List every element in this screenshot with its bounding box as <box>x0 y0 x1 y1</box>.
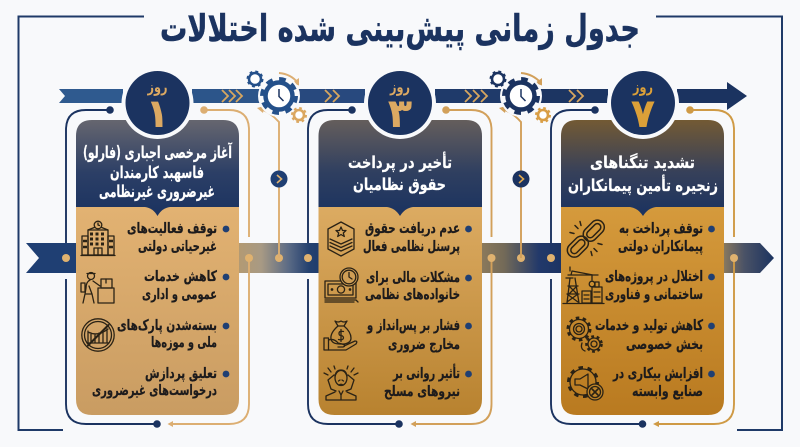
item: family financial problems: مشکلات مالی برای <box>366 270 460 286</box>
icon: military rank badge <box>328 222 354 256</box>
item: unpaid military personnel: پرسنل نظامی فعال <box>363 239 460 255</box>
connector lines: day 1 <box>66 106 249 428</box>
item: closed parks and museums: بسته‌شدن پارک‌های <box>117 318 217 334</box>
connector lines: day 7 <box>551 106 734 428</box>
item: psychological impact: تأثیر روانی بر <box>392 364 460 382</box>
header: day 3: تأخیر در پرداخت <box>348 152 452 173</box>
header: day 1: فاسهبد کارمندان <box>110 163 204 183</box>
icon: interlocking gears <box>568 318 602 352</box>
header: day 7: تشدید تنگناهای <box>590 152 695 172</box>
badge: day 3: روز <box>389 78 410 96</box>
badge: day 7 <box>607 67 679 139</box>
item: reduced public services: عمومی و اداری <box>142 287 217 303</box>
icon: broken chain <box>564 217 607 260</box>
header: day 1: آغاز مرخصی اجباری (فارلو) <box>83 141 232 163</box>
item: reduced public services <box>81 269 229 303</box>
item: savings pressure: مخارج ضروری <box>388 337 460 353</box>
chevron marker <box>270 170 288 188</box>
header: day 1 <box>76 120 239 216</box>
item: family financial problems <box>325 268 472 303</box>
middle timeline ribbon <box>26 243 774 273</box>
item: savings pressure: فشار بر پس‌انداز و <box>366 318 460 334</box>
item: contractor payments halted: پیمانکاران دولتی <box>618 239 703 255</box>
ribbon dots <box>62 254 738 262</box>
item: psychological impact <box>324 364 472 400</box>
item: projects disruption <box>563 267 715 304</box>
icon: government building <box>81 221 115 256</box>
item: halted non-essential activities: غیرحیاتی دولتی <box>138 239 217 255</box>
badge: day 1: ۱ <box>145 91 170 137</box>
item: suspended processing: تعلیق پردازش <box>145 366 217 382</box>
connector: clock to first transition <box>257 73 299 258</box>
item: psychological impact: نیروهای مسلح <box>384 384 460 400</box>
item: suspended processing: درخواست‌های غیرضروری <box>92 383 217 399</box>
icon: gear with blocked speaker <box>568 368 603 400</box>
badge: day 7: ۷ <box>631 91 655 137</box>
connector: clock to second transition <box>499 73 542 258</box>
item: projects disruption: ساختمانی و فناوری <box>605 287 703 303</box>
icon: gear clock two <box>490 72 550 122</box>
item: reduced production <box>568 318 715 353</box>
badge: day 7: روز <box>632 78 653 96</box>
item: unpaid military personnel: عدم دریافت حقوق <box>365 221 460 237</box>
icon: money bag on hand <box>324 321 357 350</box>
badge: day 1 <box>122 67 194 139</box>
item: halted non-essential activities: توقف فعالیت‌های <box>127 221 217 237</box>
badge: day 3: ۳ <box>388 91 412 137</box>
item: projects disruption: اختلال در پروژه‌های <box>605 269 703 285</box>
item: reduced production: بخش خصوصی <box>626 337 703 353</box>
header: day 7 <box>561 120 724 216</box>
header: day 7: زنجیره تأمین پیمانکاران <box>568 175 718 196</box>
badge: day 1: روز <box>147 78 168 96</box>
icon: stressed person <box>324 366 358 400</box>
icon: closed gate <box>82 319 114 351</box>
item: reduced public services: کاهش خدمات <box>144 269 217 285</box>
badge: day 3 <box>364 67 436 139</box>
item: closed parks and museums <box>82 318 229 351</box>
icon: worker with boxes <box>81 272 114 303</box>
header: day 3: حقوق نظامیان <box>353 175 446 195</box>
header: day 1: غیرضروری غیرنظامی <box>99 182 215 202</box>
panel: day 1 <box>76 120 239 415</box>
item: contractor payments halted <box>564 217 715 260</box>
item: suspended processing <box>92 366 229 399</box>
item: rising unemployment: صنایع وابسته <box>632 384 703 400</box>
icon: gear clock one <box>248 72 306 122</box>
title: جدول زمانی پیش‌بینی شده اختلالات <box>160 7 640 50</box>
panel: day 7 <box>561 120 724 415</box>
item: savings pressure <box>324 318 472 353</box>
item: rising unemployment <box>568 366 715 400</box>
chevron marker <box>512 170 530 188</box>
item: contractor payments halted: توقف پرداخت به <box>619 221 703 237</box>
item: halted non-essential activities <box>81 221 229 256</box>
header: day 3 <box>318 120 482 216</box>
panel: day 3 <box>318 120 482 415</box>
item: unpaid military personnel <box>328 221 472 256</box>
icon: money and clock <box>325 268 358 302</box>
item: reduced production: کاهش تولید و خدمات <box>595 318 703 334</box>
item: family financial problems: خانواده‌های نظامی <box>365 287 460 303</box>
item: closed parks and museums: ملی و موزه‌ها <box>151 335 217 351</box>
top timeline arrow <box>59 82 747 110</box>
icon: construction crane <box>563 267 604 304</box>
item: rising unemployment: افزایش بیکاری در <box>612 366 703 382</box>
connector lines: day 3 <box>308 106 492 428</box>
